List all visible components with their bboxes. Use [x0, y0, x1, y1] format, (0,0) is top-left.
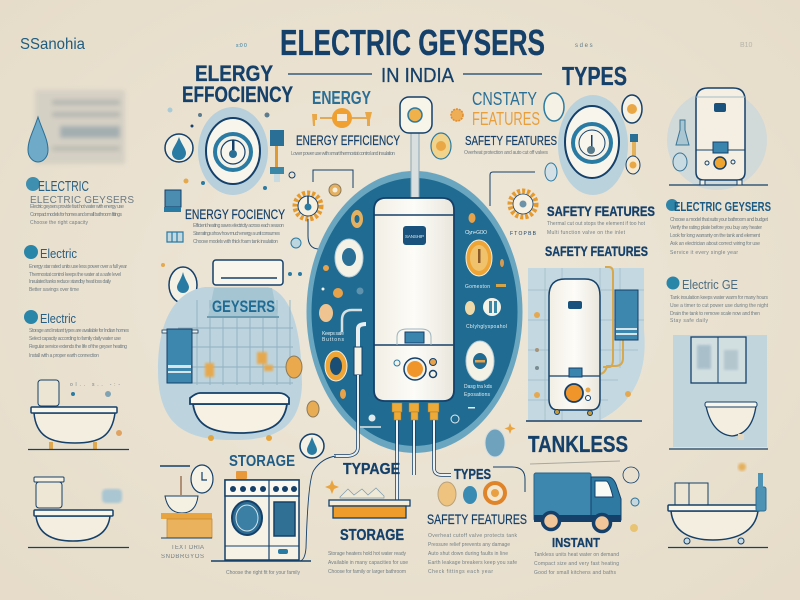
- text: inside right labels: Dasg tra kds: [464, 384, 492, 390]
- text block: cabinet caption: TEXT DRIA: [171, 545, 204, 551]
- heading: energy with icon: ENERGY: [312, 88, 371, 108]
- icon: small drop dial: [165, 134, 193, 162]
- geyser valves: [392, 403, 439, 420]
- icon: orange ring left: [322, 210, 364, 298]
- text block: electric two: Electric: [40, 311, 76, 326]
- panel: air conditioner and bathroom scene: [158, 260, 319, 441]
- heading: constancy features: CNSTATY: [472, 89, 537, 109]
- text block: storage: Available in many capacities for use: [328, 560, 408, 566]
- icon: orange blob: [319, 304, 333, 322]
- illustration: far right heater: [667, 88, 768, 190]
- icon: orange badge left: [325, 351, 347, 399]
- text block: electric two: [24, 310, 130, 359]
- text block: electric one: Better savings over time: [29, 287, 79, 293]
- heading: tankless: TANKLESS: [528, 431, 628, 457]
- icon: geyser sensor head: [400, 97, 432, 200]
- text: faint top labels: s d e s: [575, 43, 593, 49]
- text block: electric geysers left: Choose the right capacity: [30, 220, 88, 226]
- text block: cabinet caption: SNDBRGYOS: [161, 554, 204, 560]
- text block: safety features lower: Overheat cutoff valve protects tank: [428, 533, 518, 539]
- text: inside left labels: Keeps safe: [322, 331, 344, 337]
- geyser body: [374, 198, 454, 401]
- icon: pipe: [603, 267, 613, 367]
- icon: flask: [676, 120, 689, 145]
- text block: electric one: Electric: [40, 246, 77, 261]
- text block: energy efficiency: [291, 133, 400, 157]
- text block: electric geysers left: ELECTRIC GEYSERS: [30, 195, 134, 206]
- text: inside right labels: Cblyhglyspoahol: [466, 324, 507, 330]
- icon: white dial right lower: [466, 341, 494, 381]
- title: ELECTRIC GEYSERS: [280, 22, 545, 63]
- text block: safety features top: [464, 133, 557, 156]
- title: IN INDIA: [381, 65, 455, 87]
- text block: electric one: Thermostat control keeps the water at a safe level: [29, 272, 121, 278]
- icon: left toilet: [28, 477, 129, 548]
- icon: main bathtub: [190, 393, 289, 441]
- text block: instant: Tankless units heat water on demand: [534, 552, 619, 558]
- text: small label: FTOPBB: [510, 231, 537, 237]
- icon: air conditioner: [213, 260, 283, 285]
- text block: safety features lower: Auto shut down during faults in line: [428, 551, 508, 557]
- icon: left bathtub with tank: ol.. s.. -:-: [70, 382, 120, 388]
- icon: truck: [534, 473, 621, 532]
- text: washer caption: Choose the right fit for your family: [226, 570, 300, 576]
- text block: electric right: Tank insulation keeps water warm for many hours: [670, 295, 768, 301]
- text block: electric geysers right: Verify the rating plate before you buy any heater: [670, 225, 762, 231]
- text block: energy foc: Efficient heating saves electricity across each season: [193, 223, 284, 229]
- logo: SSanohia: [20, 36, 85, 53]
- text block: electric two: Regular service extends the life of the geyser heating: [29, 344, 127, 350]
- text block: electric two: Install with a proper earth connection: [29, 353, 99, 359]
- icon: washing machine: [211, 471, 311, 561]
- icon: types icons: [438, 482, 505, 506]
- text block: storage: Storage heaters hold hot water ready: [328, 551, 406, 557]
- text block: electric geysers left: Compact models for homes and small bathroom fittings: [30, 212, 123, 218]
- text block: safety features lower: Check fittings each year: [428, 569, 493, 575]
- icon: shower pipe: [342, 310, 366, 375]
- heading: tankless: [528, 431, 628, 464]
- text block: safety features top: Overheat protection and auto cut off valves: [464, 150, 548, 156]
- text block: storage: [328, 551, 408, 575]
- icon: orange gear right: [490, 172, 536, 425]
- text block: safety features right: Thermal cut out stops the element if too hot: [547, 221, 646, 227]
- text block: instant: [534, 535, 619, 576]
- text block: electric right: Use a timer to cut power use during the night: [670, 303, 769, 309]
- icon: small gauge column: [270, 130, 284, 182]
- text: inside left labels: Buttons: [322, 337, 344, 343]
- title: [280, 22, 545, 87]
- text: inside right labels: Gomeston: [465, 284, 490, 290]
- icon: orange gear: [295, 193, 321, 249]
- icon: water pipes: [300, 375, 451, 561]
- text block: electric two: Select capacity according to family daily water use: [29, 336, 121, 342]
- text block: instant: Good for small kitchens and baths: [534, 570, 616, 576]
- heading: constancy features: FEATURES: [472, 109, 540, 129]
- icon: water drop: [28, 117, 48, 162]
- text block: electric geysers right: Service it every single year: [670, 250, 738, 256]
- text block: electric one: Energy star rated units use less power over a full year: [29, 264, 127, 270]
- text block: electric one: [24, 245, 127, 293]
- text block: electric geysers right: Look for long warranty on the tank and element: [670, 233, 761, 239]
- geyser dial: [394, 358, 436, 380]
- icon: wall orange fittings: [205, 352, 273, 377]
- icon: right small tankless glyphs: [504, 423, 639, 532]
- panel: window and toilet scene: [669, 335, 768, 449]
- panel: left blurred picture: [35, 90, 125, 164]
- text block: electric geysers left: [26, 177, 134, 226]
- icon: wall heater: [549, 279, 600, 416]
- text block: safety features top: SAFETY FEATURES: [465, 133, 557, 148]
- sign: geysers: GEYSERS: [212, 297, 275, 316]
- text block: storage: Choose for family or larger bathroom: [328, 569, 406, 575]
- text block: safety features lower: Earth leakage breakers keep you safe: [428, 560, 517, 566]
- icon: orange badge right: [466, 240, 492, 276]
- text block: energy efficiency: ENERGY EFFICIENCY: [296, 133, 400, 148]
- icon: towel: [162, 329, 198, 383]
- text: inside right labels: Eposations: [464, 392, 490, 398]
- icon: drop dial: [300, 434, 324, 458]
- text block: energy foc: Choose models with thick foam tank insulation: [193, 239, 278, 245]
- heading: storage: STORAGE: [229, 453, 295, 470]
- text block: electric one: Insulated tanks reduce standby heat loss daily: [29, 279, 112, 285]
- icon: clock: [191, 465, 213, 493]
- icon: small right orange icons: [465, 213, 506, 315]
- heading: energy efficiency: ELERGY: [195, 61, 273, 86]
- icon: dial above bathroom: [169, 267, 197, 303]
- panel: wall heater scene: [526, 267, 645, 421]
- text block: safety features lower: [427, 512, 527, 575]
- text block: safety features right: SAFETY FEATURES: [547, 203, 655, 219]
- heading: safety features 2: SAFETY FEATURES: [545, 243, 648, 259]
- text: inside right labels: Clyn+GOO: [465, 230, 487, 236]
- text block: electric geysers right: Choose a model that suits your bathroom and budget: [670, 217, 769, 223]
- heading: energy efficiency: [182, 61, 293, 107]
- geyser display: [397, 329, 431, 345]
- text block: electric geysers left: ELECTRIC: [38, 178, 89, 195]
- text: faint top labels: [236, 42, 753, 49]
- text block: instant: INSTANT: [552, 535, 600, 550]
- text block: instant: Compact size and very fast heating: [534, 561, 619, 567]
- text block: safety features right: Multi function valve on the inlet: [547, 230, 626, 236]
- text block: safety features lower: Pressure relief prevents any damage: [428, 542, 510, 548]
- heading: constancy features: [472, 89, 540, 129]
- geyser label: SANSHIP: [405, 234, 424, 239]
- icon: right big dial: [558, 95, 628, 195]
- text: inside right labels: [464, 230, 507, 398]
- sign: geysers: [207, 288, 279, 318]
- icon: orange tray: [329, 488, 410, 518]
- heading: storage center: STORAGE: [340, 527, 404, 544]
- text block: safety features lower: SAFETY FEATURES: [427, 512, 527, 527]
- icon: small lower-circle glyphs: [360, 407, 475, 428]
- text block: electric geysers right: [666, 199, 771, 256]
- text block: electric right: Stay safe daily: [670, 318, 708, 324]
- decorative connector and icons: [161, 108, 353, 276]
- icon: right bathtub: [668, 463, 768, 548]
- icon: sink and cabinet: [160, 466, 212, 538]
- illustration: main geyser: [374, 97, 454, 420]
- text block: electric two: Storage and instant types are available for Indian homes: [29, 328, 130, 334]
- icon: blue box: [615, 290, 638, 340]
- heading: energy efficiency: EFFOCIENCY: [182, 82, 293, 107]
- text block: energy efficiency: Lower power use with smart thermostat control and insulation: [291, 151, 395, 157]
- icon: left bathtub with tank: [28, 380, 129, 450]
- text block: cabinet caption: [161, 545, 204, 560]
- connector: types: [493, 467, 525, 492]
- text: faint top labels: B10: [740, 42, 753, 49]
- text block: safety features right: [547, 203, 655, 236]
- heading: types lower: TYPES: [454, 466, 491, 483]
- text block: energy foc: Star ratings show how much energy a unit consumes: [193, 231, 280, 237]
- text: inside left labels: [322, 331, 344, 343]
- icon: round jar: [673, 153, 687, 171]
- icon: main energy dial: [198, 107, 268, 195]
- icon: steel dial: [485, 429, 505, 457]
- text block: electric geysers right: Ask an electrician about correct wiring for use: [670, 241, 760, 247]
- icon: white dial left: [335, 239, 363, 277]
- icon: small orange dials top: [431, 93, 642, 159]
- heading: typage: TYPAGE: [343, 461, 400, 478]
- geyser label: [403, 226, 426, 245]
- panel: central circle: [306, 171, 522, 453]
- text block: electric geysers left: Electric geysers provide fast hot water with energy use: [30, 204, 124, 210]
- icon: right small gauge: [545, 134, 640, 181]
- icon: orange star: [325, 480, 339, 494]
- icon: wall small dots: [534, 312, 631, 398]
- text: faint top labels: s:0 0: [236, 43, 247, 49]
- heading: energy with icon: [312, 88, 372, 128]
- text block: electric right: Electric GE: [682, 277, 738, 292]
- icon: white feature dial right: [483, 298, 501, 316]
- text block: energy foc: ENERGY FOCIENCY: [185, 206, 285, 222]
- icon: small device: [164, 190, 183, 242]
- text block: energy foc: [185, 206, 285, 245]
- heading: types: TYPES: [562, 61, 627, 91]
- text block: electric right: [666, 276, 769, 324]
- text block: electric right: Drain the tank to remove scale now and then: [670, 311, 760, 317]
